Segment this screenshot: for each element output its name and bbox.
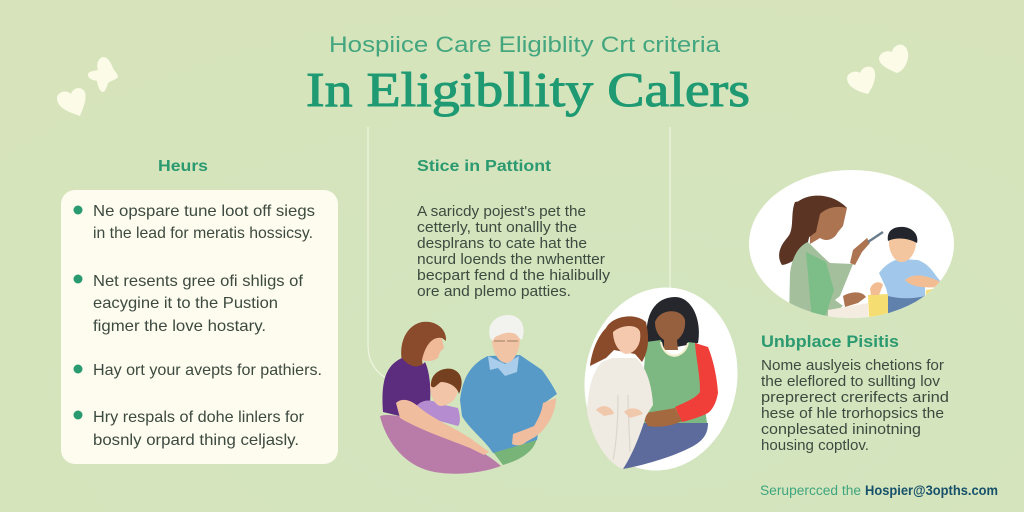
mother's purple shirt bbox=[382, 358, 430, 420]
white oval bbox=[570, 275, 752, 483]
man's collar bbox=[488, 356, 519, 376]
text block: middle paragraph: ncurd loends the nwhentter bbox=[417, 251, 605, 268]
footer: contact line: Hospier@3opths.com bbox=[865, 483, 998, 498]
ponytail bbox=[779, 200, 812, 265]
man's glasses bbox=[494, 340, 518, 342]
text block: middle paragraph: desplrans to cate hat the bbox=[417, 235, 587, 252]
footer: contact line: Serupercced the bbox=[760, 483, 861, 498]
man's white hair bbox=[489, 315, 524, 341]
caregiver's lower hand bbox=[843, 292, 866, 307]
green vest bbox=[640, 340, 707, 423]
illustration: family of three bbox=[380, 315, 557, 474]
text block: right paragraph: the eleflored to sullting lov bbox=[761, 373, 941, 390]
subtitle: Hospiice Care Eligiblity Crt criteria bbox=[329, 32, 721, 57]
blanket bbox=[380, 415, 501, 474]
jeans bbox=[623, 423, 708, 469]
child's head bbox=[430, 379, 458, 406]
bullet 4: bosnly orpard thing celjasly. bbox=[93, 432, 299, 449]
dress center folds bbox=[613, 395, 630, 460]
text block: middle paragraph: A saricdy pojest's pet the bbox=[417, 203, 586, 220]
caregiver's hair bbox=[795, 196, 847, 238]
man's arm bbox=[512, 398, 556, 445]
seated woman's hand bbox=[640, 408, 682, 427]
man's blue shirt bbox=[460, 355, 557, 453]
caregiver's face bbox=[810, 205, 847, 244]
bullet 1: in the lead for meratis hossicsy. bbox=[93, 225, 313, 242]
text block: middle paragraph bbox=[417, 203, 611, 300]
brown hair bbox=[590, 316, 648, 366]
text block: right paragraph: conplesated ininotning bbox=[761, 421, 921, 438]
young woman's face bbox=[613, 326, 640, 354]
text block: middle paragraph: ore and plemo patties. bbox=[417, 283, 571, 300]
mother's hair bbox=[401, 322, 446, 372]
bullet 4: Hry respals of dohe linlers for bbox=[93, 409, 305, 426]
text block: right paragraph bbox=[761, 357, 949, 454]
child's blue shirt bbox=[879, 259, 942, 298]
text block: middle paragraph: cetterly, tunt onallly the bbox=[417, 219, 577, 236]
text block: right paragraph: preprerect crerifects arind bbox=[761, 389, 949, 406]
collar bbox=[661, 342, 688, 356]
text block: right paragraph: housing coptlov. bbox=[761, 437, 869, 454]
bullet 2: Net resents gree ofi shligs of bbox=[93, 273, 304, 290]
bullet 3: Hay ort your avepts for pathiers. bbox=[93, 362, 322, 379]
text block: right paragraph: hese of hle trorhopsics the bbox=[761, 405, 944, 422]
white dress bbox=[587, 358, 653, 469]
dark hair bbox=[647, 297, 699, 350]
bullet 2 bbox=[74, 273, 304, 335]
heading: middle column: Stice in Pattiont bbox=[417, 158, 552, 175]
illustration: caregiver and child in white oval bbox=[749, 170, 954, 320]
man's shorts bbox=[490, 438, 537, 465]
bullet 2: eacygine it to the Pustion bbox=[93, 295, 278, 312]
bullet 1 bbox=[74, 203, 315, 242]
child's lilac shirt bbox=[415, 401, 460, 426]
caregiver's raised arm and tool bbox=[850, 232, 883, 265]
heading: right column: Unbplace Pisitis bbox=[761, 332, 899, 351]
child's hands bbox=[870, 276, 941, 295]
bullet 4 bbox=[74, 409, 305, 449]
bullet 1: Ne opspare tune loot off siegs bbox=[93, 203, 315, 220]
illustration: two women in white oval bbox=[570, 275, 752, 483]
child's hair bbox=[431, 369, 462, 394]
icon: hearts top right bbox=[847, 45, 908, 94]
man's head bbox=[492, 329, 520, 363]
table bbox=[828, 303, 868, 318]
white oval bbox=[749, 170, 954, 318]
bullet 2: figmer the love hostary. bbox=[93, 318, 266, 335]
child's head bbox=[888, 238, 916, 262]
panel: left bullet card bbox=[61, 190, 338, 464]
green centre panel bbox=[806, 252, 834, 320]
heading: left column: Heurs bbox=[158, 158, 208, 175]
mother's face bbox=[416, 335, 444, 361]
text block: middle paragraph: becpart fend d the hialibully bbox=[417, 267, 611, 284]
red sleeve bbox=[675, 343, 718, 422]
yellow block bbox=[926, 288, 934, 295]
woman's neck and face bbox=[655, 311, 685, 350]
icon: hearts top left bbox=[57, 57, 118, 116]
figures clipped to oval bbox=[779, 196, 942, 320]
green top bbox=[789, 242, 853, 320]
child's hair bbox=[888, 227, 917, 243]
yellow cup bbox=[868, 294, 888, 317]
hands bbox=[596, 406, 643, 418]
child's jeans bbox=[888, 296, 925, 314]
text block: right paragraph: Nome auslyeis chetions for bbox=[761, 357, 944, 374]
mother's arm bbox=[396, 400, 489, 455]
title: In Eligibllity Calers bbox=[306, 62, 750, 117]
footer: contact line bbox=[760, 483, 998, 498]
